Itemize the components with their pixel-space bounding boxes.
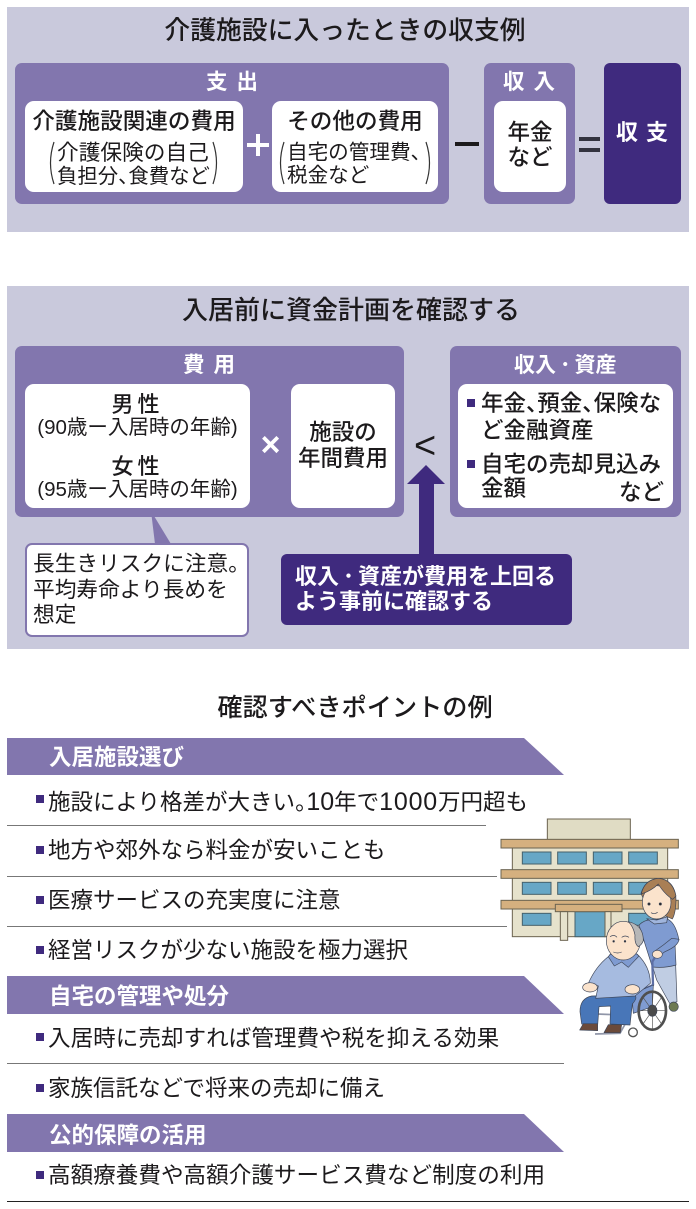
man hands: [583, 983, 597, 992]
man legs: [580, 995, 636, 1025]
wheelchair: [632, 957, 655, 995]
operator: less than: <: [414, 425, 436, 467]
box: care facility costs: [25, 101, 243, 192]
bullet: [36, 795, 44, 803]
caregiver hair back: [641, 878, 676, 919]
bullet: [36, 896, 44, 904]
bullet: [467, 460, 475, 468]
panel: funding plan: [7, 286, 689, 649]
callout: check income exceeds costs: [281, 554, 572, 625]
operator: multiply: ×: [261, 426, 280, 464]
text: expected home sale: [481, 452, 661, 501]
panel: expenses: [15, 63, 449, 204]
section header: choosing a facility: [7, 738, 564, 775]
label: income: 収入: [503, 70, 564, 94]
item: public systems: 高額療養費や高額介護サービス費など制度の利用: [48, 1163, 545, 1188]
heading: funding plan: 入居前に資金計画を確認する: [182, 295, 520, 325]
item: management risk: 経営リスクが少ない施設を極力選択: [48, 938, 408, 963]
bullet: [36, 946, 44, 954]
text: pensions and financial assets: ど金融資産: [481, 418, 594, 443]
text: home management: 自宅の管理や処分: [49, 984, 229, 1009]
text: check income exceeds costs: 収入･資産が費用を上回る: [295, 564, 556, 589]
text: care facility costs: 介護施設関連の費用: [32, 109, 236, 134]
item: rural fees: 地方や郊外なら料金が安いことも: [48, 838, 386, 863]
box: annual facility cost: [291, 384, 395, 508]
caregiver shirt: [639, 918, 679, 967]
box: balance: [604, 63, 681, 204]
box: pension: [494, 101, 566, 192]
text: pensions and financial assets: [481, 391, 661, 443]
text: pensions and financial assets: 年金、預金、保険な: [481, 391, 661, 416]
text: pension: [507, 120, 552, 170]
callout pointer: [152, 517, 170, 543]
section header: public support: [7, 1114, 564, 1152]
bullet: [36, 1171, 44, 1179]
label: income and assets: 収入･資産: [514, 354, 616, 377]
item: family trust: 家族信託などで将来の売却に備え: [48, 1076, 385, 1101]
heading: income and expense example: 介護施設に入ったときの収支例: [164, 17, 526, 45]
text: choosing a facility: 入居施設選び: [49, 745, 184, 770]
text: annual facility cost: 施設の: [309, 420, 377, 445]
illustration: care facility building: [500, 818, 679, 941]
caregiver face: [642, 886, 671, 919]
panel: costs: [15, 346, 404, 517]
operator: minus: [455, 142, 479, 146]
text: other cost details: [287, 141, 431, 187]
text: male: 男性: [111, 392, 164, 417]
item: selling on entry: 入居時に売却すれば管理費や税を抑える効果: [48, 1026, 499, 1051]
caregiver pants: [652, 965, 677, 1004]
icon: left parenthesis: [50, 142, 54, 184]
text: longevity risk: 長生きリスクに注意。: [33, 551, 250, 576]
label: costs: 費用: [183, 353, 244, 377]
box: other costs: [272, 101, 438, 192]
item: medical service: 医療サービスの充実度に注意: [48, 888, 341, 913]
operator: equals: [579, 137, 600, 152]
text: female: 女性: [111, 454, 164, 479]
label: expenses: 支出: [206, 70, 267, 94]
text: expected home sale: 金額: [481, 476, 526, 501]
man sweater: [588, 954, 650, 998]
text: public support: 公的保障の活用: [49, 1123, 207, 1148]
bullet: [36, 1084, 44, 1092]
text: expected home sale: 自宅の売却見込み: [481, 452, 661, 477]
bullet: [36, 846, 44, 854]
text: care facility cost details: 負担分、食費など: [57, 166, 210, 188]
item: cost gap: 施設により格差が大きい。10年で1000万円超も: [48, 788, 528, 816]
text: male formula: (90歳ー入居時の年齢): [37, 416, 238, 439]
text: longevity risk: [33, 551, 250, 627]
text: check income exceeds costs: よう事前に確認する: [295, 589, 493, 614]
text: annual facility cost: [298, 420, 388, 471]
text: other cost details: 自宅の管理費、: [287, 141, 431, 164]
callout: longevity risk: [25, 543, 249, 637]
text: pension: など: [507, 145, 552, 170]
box: life expectancy years: [25, 384, 250, 508]
text: female formula: (95歳ー入居時の年齢): [37, 478, 238, 501]
man shoes: [580, 1024, 598, 1031]
box: income and asset list: [458, 384, 673, 508]
operator: plus: [247, 134, 269, 156]
icon: left parenthesis: [280, 142, 284, 184]
bullet: [467, 399, 475, 407]
text: annual facility cost: 年間費用: [298, 446, 388, 471]
text: other costs: その他の費用: [287, 109, 423, 134]
bullet: [36, 1033, 44, 1041]
text: care facility cost details: 介護保険の自己: [57, 140, 209, 165]
text: care facility cost details: [57, 140, 210, 188]
arrow: up to less-than sign: [407, 465, 445, 554]
label: balance: 収支: [616, 120, 676, 145]
text: longevity risk: 想定: [33, 602, 76, 627]
caregiver arm: [655, 938, 679, 956]
text: other cost details: 税金など: [287, 164, 369, 187]
icon: right parenthesis: [426, 142, 430, 184]
illustration: caregiver pushing elderly man in wheelchair: [579, 878, 680, 1038]
panel: income and expense example: [7, 7, 689, 232]
text: pension: 年金: [507, 120, 552, 145]
panel: income and assets: [450, 346, 681, 517]
icon: right parenthesis: [212, 142, 218, 184]
man head: [606, 921, 640, 960]
text: etc: など: [619, 480, 664, 505]
section header: home management: [7, 976, 564, 1014]
text: check income exceeds costs: [295, 564, 556, 614]
text: longevity risk: 平均寿命より長めを: [33, 576, 228, 602]
panel: income: [484, 63, 575, 204]
heading: points to check: 確認すべきポイントの例: [217, 694, 493, 722]
